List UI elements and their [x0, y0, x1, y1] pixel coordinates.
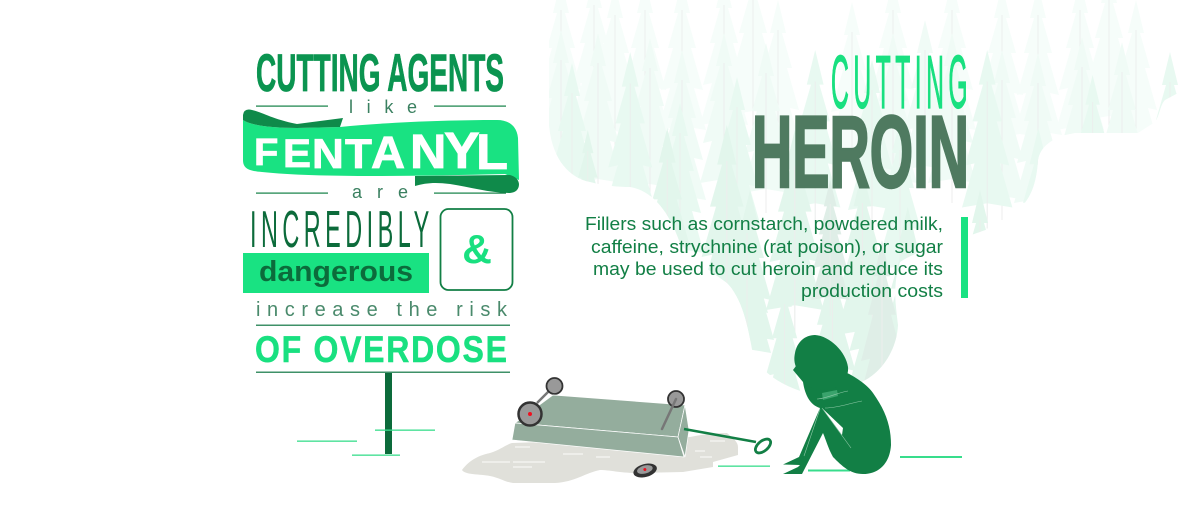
label: dangerous: dangerous	[259, 256, 413, 288]
banner: fentanyl: T	[345, 131, 372, 178]
wagon wheel: front left	[518, 402, 542, 426]
title: cutting agents: CUTTING AGENTS	[256, 44, 504, 103]
forest background	[549, 0, 1178, 391]
banner: fentanyl: F	[254, 132, 278, 174]
banner: fentanyl: Y	[444, 123, 480, 180]
sign post	[385, 373, 392, 454]
description text: may be used to cut heroin and reduce its	[593, 259, 943, 279]
title: heroin: HEROIN	[752, 95, 969, 209]
accent bar	[961, 217, 968, 298]
text: are: are	[352, 182, 408, 202]
label: dangerous	[243, 253, 429, 293]
loose wheel	[632, 461, 658, 480]
description text: Fillers such as cornstarch, powdered milk,	[585, 214, 943, 234]
text: incredibly: INCREDIBLY	[250, 199, 434, 259]
text: like: like	[349, 97, 417, 117]
description text: caffeine, strychnine (rat poison), or sugar	[591, 237, 943, 257]
wagon wheel: rear left	[546, 378, 562, 394]
ampersand box	[440, 209, 512, 290]
ground lines	[297, 430, 962, 472]
heading: of overdose: OF OVERDOSE	[255, 330, 509, 371]
description text	[585, 214, 943, 301]
banner: fentanyl: A	[371, 127, 405, 178]
banner: fentanyl: N	[312, 131, 344, 178]
description text: production costs	[801, 281, 943, 301]
banner: fentanyl	[243, 110, 519, 193]
puddle	[462, 433, 738, 483]
title: cutting: CUTTING	[831, 40, 972, 124]
banner: fentanyl: E	[283, 131, 311, 176]
text: increase the risk: increase the risk	[256, 299, 508, 321]
wagon handle	[684, 429, 773, 456]
wagon	[512, 378, 773, 480]
person sitting	[783, 335, 891, 474]
ampersand box: &	[462, 226, 492, 272]
banner: fentanyl: N	[410, 125, 446, 179]
banner: fentanyl: L	[476, 124, 508, 180]
wagon axle and wheel: right	[662, 391, 684, 429]
